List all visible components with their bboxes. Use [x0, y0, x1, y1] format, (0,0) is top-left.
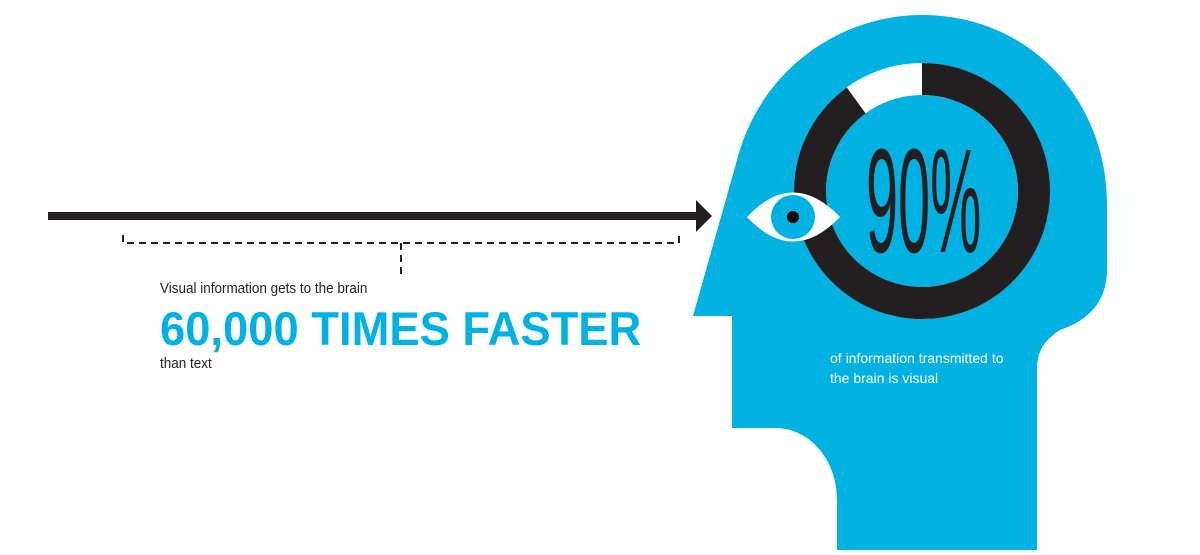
- caption: 90% explanation: of information transmitted to: [830, 350, 1004, 366]
- caption: 90% explanation: the brain is visual: [830, 370, 938, 386]
- head silhouette: [693, 15, 1107, 550]
- big number 90%: 90%: [866, 118, 981, 284]
- headline: 60,000 TIMES FASTER: 60,000 TIMES FASTER: [160, 302, 641, 355]
- dashed bracket: [123, 235, 679, 277]
- caption: 90% explanation: [830, 350, 1004, 386]
- text: than text: than text: [160, 355, 212, 372]
- text: visual info intro: Visual information gets to the brain: [160, 280, 367, 297]
- donut chart: 90%: [810, 79, 1034, 303]
- arrow: [48, 200, 712, 232]
- icon: eye: [747, 192, 840, 242]
